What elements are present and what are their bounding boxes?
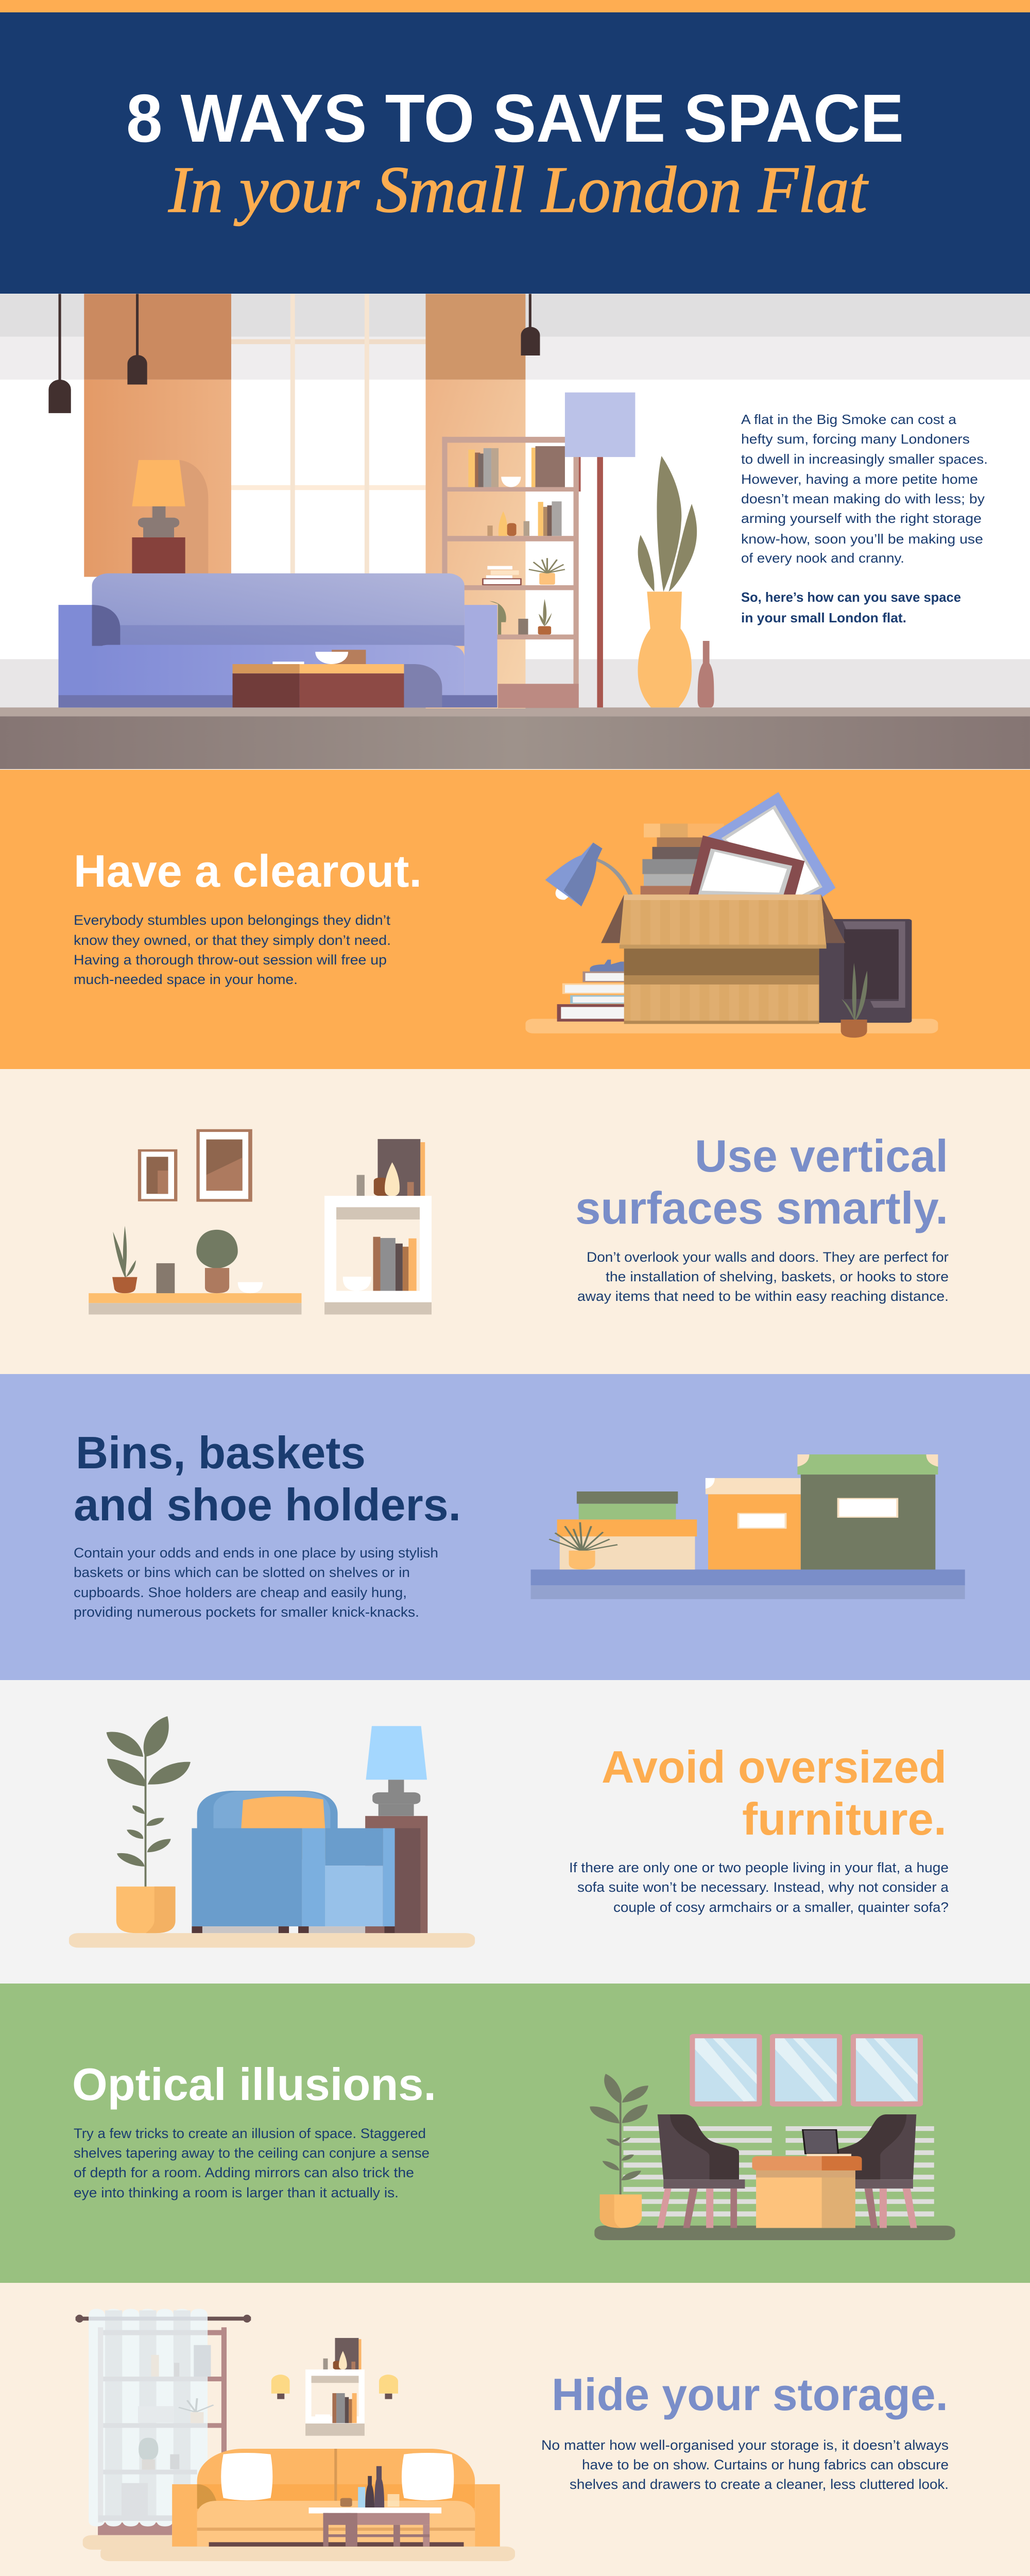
section 6 heading: Hide your storage. (552, 2369, 948, 2420)
section 3 heading: and shoe holders. (74, 1479, 461, 1530)
section 2 heading: surfaces smartly. (575, 1182, 948, 1233)
title: 8 WAYS TO SAVE SPACE (126, 80, 904, 156)
intro text: A flat in the Big Smoke can cost a (741, 412, 957, 427)
mirrors (690, 2034, 923, 2107)
title: In your Small London Flat (168, 153, 869, 226)
left boxes (557, 1492, 697, 1569)
section 3 text (74, 1545, 438, 1620)
section 4 heading (602, 1741, 947, 1844)
section 1 text: Having a thorough throw-out session will free up (74, 952, 387, 968)
section 1 text: Everybody stumbles upon belongings they didn’t (74, 912, 391, 928)
section 6 text: No matter how well-organised your storage is, it doesn’t always (541, 2437, 949, 2453)
books behind box (641, 824, 724, 895)
cardboard box (601, 894, 846, 1024)
right box (797, 1454, 938, 1569)
section 4 text (569, 1860, 949, 1915)
section 5 heading: Optical illusions. (72, 2059, 436, 2110)
wall slats (623, 2126, 934, 2216)
section 2 text (577, 1249, 949, 1304)
section 2 text: away items that need to be within easy reaching distance. (577, 1289, 949, 1304)
window frame (231, 294, 426, 575)
coffee table (308, 2466, 441, 2547)
intro text: doesn’t mean making do with less; by (741, 491, 985, 506)
plant (590, 2074, 648, 2228)
section 3 heading (74, 1427, 461, 1530)
section 5 text (74, 2126, 430, 2200)
lamp and side table (365, 1726, 427, 1933)
intro text: to dwell in increasingly smaller spaces. (741, 451, 988, 467)
sofa (59, 573, 497, 707)
section 1 text (74, 912, 391, 987)
desk (752, 2130, 862, 2228)
section 5 text: Try a few tricks to create an illusion of space. Staggered (74, 2126, 426, 2141)
intro text: of every nook and cranny. (741, 550, 904, 566)
sofa (172, 2449, 500, 2547)
stacked books (557, 960, 625, 1022)
intro text: know-how, soon you’ll be making use (741, 531, 983, 547)
section 5 text: eye into thinking a room is larger than it actually is. (74, 2185, 399, 2200)
tall plant (107, 1716, 191, 1933)
bookshelf (442, 437, 579, 708)
table lamp (132, 460, 208, 577)
left chair (657, 2114, 745, 2228)
potted plant (841, 963, 867, 1038)
section 3 illustration: storage boxes (531, 1454, 965, 1599)
section 6 text: have to be on show. Curtains or hung fabrics can obscure (582, 2457, 949, 2472)
shelf behind curtain (98, 2327, 227, 2535)
section 3 heading: Bins, baskets (76, 1427, 366, 1478)
section 3 text: Contain your odds and ends in one place by using stylish (74, 1545, 438, 1561)
wall shelf and sconces (271, 2338, 398, 2436)
section 4 text: sofa suite won’t be necessary. Instead, why not consider a (577, 1879, 949, 1895)
section 1: have a clearout heading: Have a clearout. (74, 845, 422, 896)
section 5 illustration: mirrors, chairs and desk (590, 2034, 955, 2240)
tv (788, 919, 912, 1023)
section 1 text: much-needed space in your home. (74, 972, 298, 987)
right chair (831, 2114, 917, 2228)
floor (83, 2535, 515, 2561)
picture frames (138, 1129, 252, 1202)
coffee table (233, 650, 404, 707)
middle box (706, 1478, 801, 1569)
intro text: However, having a more petite home (741, 471, 978, 487)
section 4 text: couple of cosy armchairs or a smaller, quainter sofa? (613, 1900, 949, 1915)
section 5 text: of depth for a room. Adding mirrors can also trick the (74, 2165, 414, 2180)
intro text: in your small London flat. (741, 610, 906, 625)
section 3 text: cupboards. Shoe holders are cheap and easily hung, (74, 1585, 407, 1600)
shelf with plants (89, 1226, 301, 1314)
white shelf unit (324, 1139, 432, 1314)
curtain (76, 2309, 251, 2527)
intro text: arming yourself with the right storage (741, 511, 982, 526)
small plant (549, 1522, 617, 1569)
section 2 illustration: wall shelves (89, 1129, 432, 1314)
section 3 text: providing numerous pockets for smaller knick-knacks. (74, 1604, 419, 1620)
intro text (741, 412, 988, 625)
title (126, 80, 904, 226)
section 4 text: If there are only one or two people living in your flat, a huge (569, 1860, 949, 1875)
section 4 heading: Avoid oversized (602, 1741, 947, 1792)
section 1 illustration: moving box (525, 792, 938, 1038)
hero illustration: living room (0, 294, 1030, 769)
section 2 text: the installation of shelving, baskets, or hooks to store (606, 1269, 949, 1284)
section 5 text: shelves tapering away to the ceiling can conjure a sense (74, 2145, 430, 2161)
section 6 text (541, 2437, 949, 2492)
vase and plant (638, 456, 714, 707)
section 3 text: baskets or bins which can be slotted on shelves or in (74, 1565, 410, 1580)
intro text: hefty sum, forcing many Londoners (741, 431, 970, 447)
section 6 illustration: curtained shelf and sofa (76, 2309, 515, 2561)
intro text: So, here’s how can you save space (741, 589, 961, 605)
curtains (84, 294, 525, 708)
floor lamp (565, 393, 635, 707)
section 6 text: shelves and drawers to create a cleaner, less cluttered look. (570, 2477, 949, 2492)
section 2 heading: Use vertical (695, 1130, 948, 1181)
section 1 text: know they owned, or that they simply don’t need. (74, 933, 391, 948)
section 4 heading: furniture. (742, 1793, 947, 1844)
section 2 heading (575, 1130, 948, 1233)
armchair body (192, 1791, 395, 1933)
desk lamp (545, 842, 630, 906)
pendant lamps (48, 294, 540, 413)
section 4 illustration: armchair (69, 1716, 475, 1947)
section 2 text: Don’t overlook your walls and doors. They are perfect for (587, 1249, 949, 1265)
frames (689, 792, 835, 909)
